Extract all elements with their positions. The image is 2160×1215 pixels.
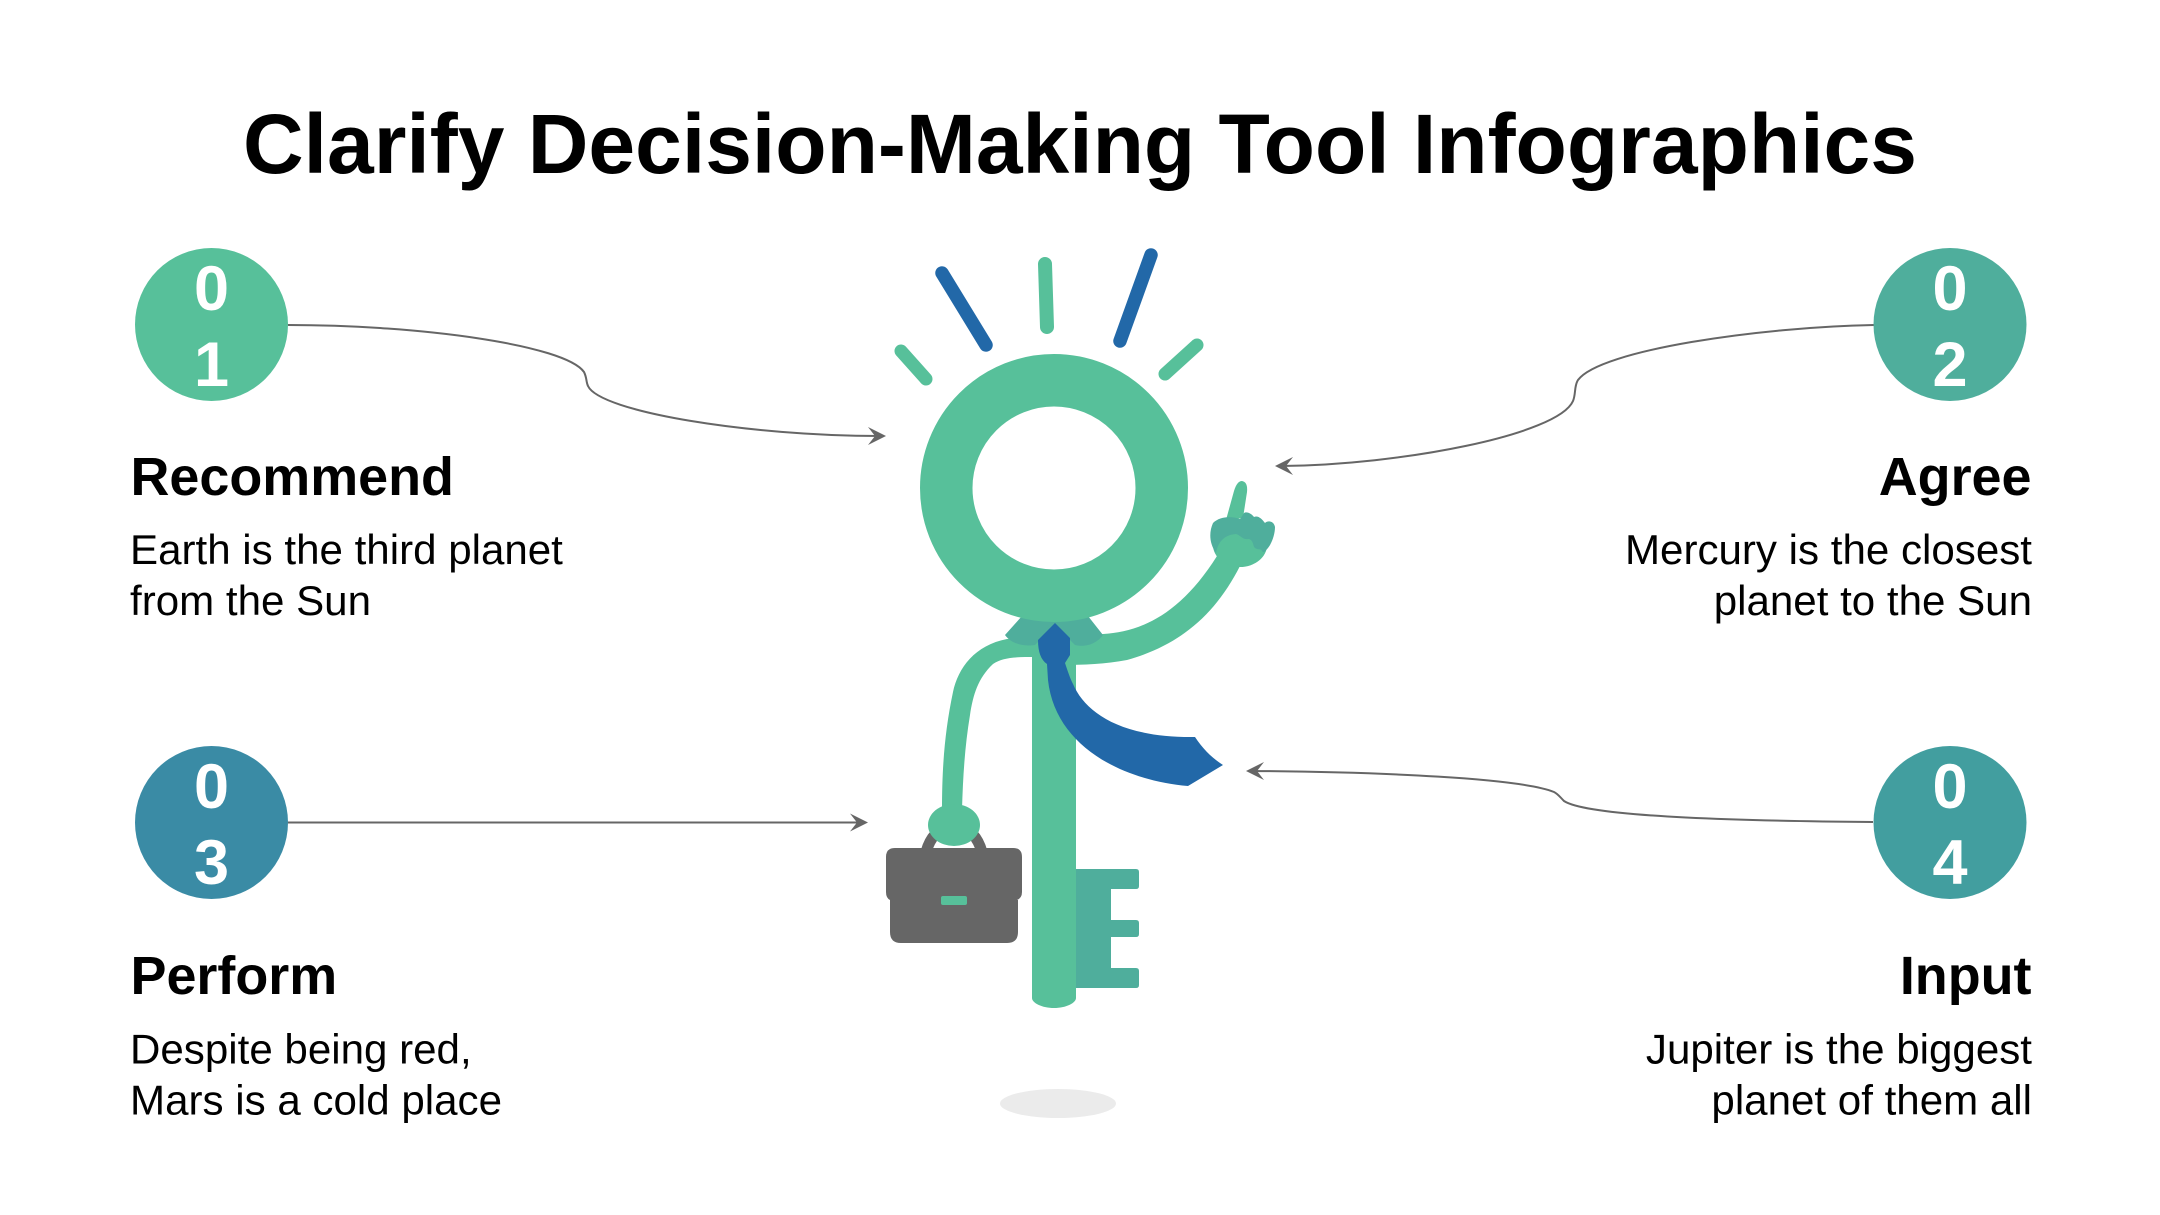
item 03: number badge: 3 <box>194 828 229 898</box>
item 02: heading: Agree <box>1879 447 2032 507</box>
item 04: description: planet of them all <box>1711 1076 2032 1124</box>
item 01: description: from the Sun <box>130 577 371 624</box>
head ring <box>946 380 1162 596</box>
collar <box>1005 616 1103 646</box>
key shaft <box>1032 600 1076 1008</box>
item 02: number badge: 0 <box>1932 254 1968 324</box>
connector arrow: 02 to key <box>1275 325 1874 475</box>
item 01: number badge: 1 <box>194 330 229 400</box>
item 02: description: Mercury is the closest <box>1625 526 2032 573</box>
item 03: number badge <box>135 746 288 899</box>
item 02: number badge <box>1874 248 2026 401</box>
connector arrow: 04 to key <box>1246 762 1873 822</box>
item 02: number badge: 2 <box>1932 330 1968 400</box>
item 04: description: Jupiter is the biggest <box>1646 1026 2032 1072</box>
connector arrow: 03 to key <box>288 814 868 832</box>
key teeth <box>1076 869 1139 988</box>
illustration: key character <box>886 255 1275 1118</box>
item 04: heading: Input <box>1900 946 2032 1006</box>
item 02: description: planet to the Sun <box>1714 577 2032 624</box>
item 01: number badge <box>135 248 288 401</box>
left arm <box>942 636 1040 810</box>
item 03: heading: Perform <box>130 946 337 1006</box>
icon: idea rays <box>901 255 1197 379</box>
briefcase <box>886 804 1022 943</box>
item 04: number badge: 0 <box>1932 752 1968 822</box>
necktie <box>1038 623 1223 786</box>
item 01: description: Earth is the third planet <box>130 526 563 573</box>
item 01: number badge: 0 <box>194 254 229 324</box>
title: Clarify Decision-Making Tool Infographics <box>243 97 1917 191</box>
item 01: heading: Recommend <box>130 447 454 507</box>
item 03: description: Mars is a cold place <box>130 1076 502 1124</box>
ground shadow <box>1000 1089 1116 1118</box>
item 04: number badge: 4 <box>1932 828 1968 898</box>
item 04: number badge <box>1874 746 2026 899</box>
right arm <box>1060 556 1240 665</box>
connector arrow: 01 to key <box>288 325 886 445</box>
item 03: description: Despite being red, <box>130 1026 472 1072</box>
pointing hand <box>1210 481 1275 567</box>
item 03: number badge: 0 <box>194 752 229 822</box>
